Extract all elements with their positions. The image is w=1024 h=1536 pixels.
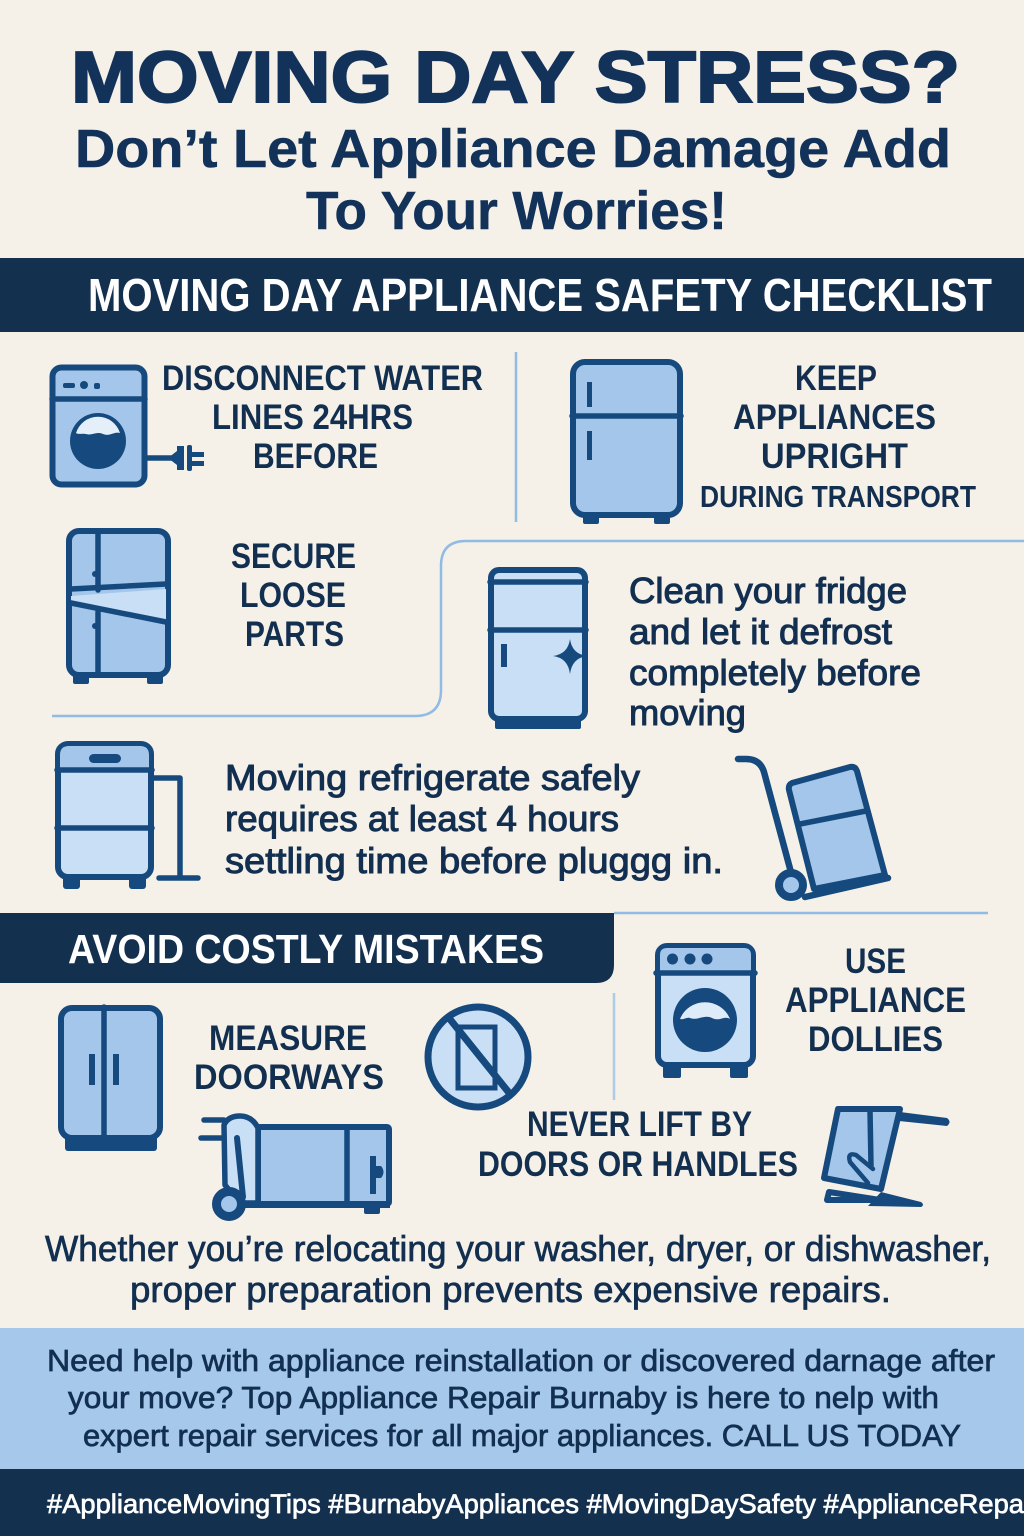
text: keep appliances upright: DURING TRANSPORT: [700, 479, 976, 514]
text: use appliance dollies: APPLIANCE: [785, 981, 966, 1020]
text: keep appliances upright: APPLIANCES: [733, 398, 936, 437]
icon: clean fridge with sparkle: [490, 570, 587, 729]
title: Don’t Let Appliance Damage Add: [75, 119, 951, 179]
text: use appliance dollies: DOLLIES: [808, 1020, 943, 1059]
panel: call to action: your move? Top Appliance Repair Burnaby is here to nelp with: [68, 1380, 939, 1415]
text: closing statement: Whether you’re relocating your washer, dryer, or dishwasher,: [45, 1228, 991, 1269]
text: keep appliances upright: [700, 359, 976, 514]
icon: no lifting symbol: [428, 1007, 528, 1107]
text: clean your fridge: and let it defrost: [629, 611, 892, 652]
text: clean your fridge: Clean your fridge: [629, 570, 907, 611]
icon: french door fridge: [61, 1007, 160, 1151]
text: moving refrigerate safely: [225, 757, 723, 881]
section banner: safety checklist: [0, 258, 1024, 332]
text: secure loose parts: SECURE: [231, 537, 356, 576]
text: keep appliances upright: KEEP: [795, 359, 877, 398]
text: keep appliances upright: UPRIGHT: [761, 437, 908, 476]
panel: call to action: expert repair services for all major appliances. CALL US TODAY: [83, 1418, 961, 1453]
icon: appliance on dolly: [201, 1116, 390, 1216]
icon: upright fridge: [572, 362, 681, 524]
text: moving refrigerate safely: Moving refrigerate safely: [225, 757, 640, 798]
icon: dryer appliance with stand: [57, 744, 198, 889]
text: disconnect water lines: DISCONNECT WATER: [162, 359, 483, 398]
icon: washer with unplugged cord: [52, 368, 204, 484]
text: measure doorways: [194, 1019, 384, 1097]
text: closing statement: proper preparation prevents expensive repairs.: [130, 1269, 891, 1310]
icon: fridge on hand truck: [738, 759, 888, 897]
panel: call to action: [0, 1328, 1024, 1469]
text: moving refrigerate safely: settling time before pluggg in.: [225, 840, 723, 881]
text: clean your fridge: completely before: [629, 652, 921, 693]
title: To Your Worries!: [306, 181, 727, 241]
text: closing statement: [45, 1228, 991, 1310]
title: MOVING DAY STRESS?: [71, 38, 960, 118]
icon: washer with drum: [656, 946, 755, 1078]
text: clean your fridge: [629, 570, 921, 733]
text: clean your fridge: moving: [629, 692, 746, 733]
text: use appliance dollies: USE: [845, 942, 906, 981]
footer: hashtags: #ApplianceMovingTips #BurnabyAppliances #MovingDaySafety #ApplianceRepa: [47, 1489, 1024, 1519]
section banner: avoid costly mistakes: [0, 913, 614, 983]
icon: tilted appliance with hand on handle: [824, 1109, 950, 1207]
text: secure loose parts: LOOSE: [240, 576, 346, 615]
text: measure doorways: DOORWAYS: [194, 1058, 384, 1097]
text: disconnect water lines: [162, 359, 483, 476]
text: secure loose parts: [231, 537, 356, 654]
text: never lift by doors or handles: [478, 1105, 798, 1184]
text: use appliance dollies: [785, 942, 966, 1059]
icon: fridge with strapped loose parts: [69, 531, 168, 684]
text: measure doorways: MEASURE: [209, 1019, 367, 1058]
title: [71, 38, 960, 241]
section banner: avoid costly mistakes: AVOID COSTLY MISTAKES: [68, 926, 544, 972]
text: secure loose parts: PARTS: [245, 615, 344, 654]
text: never lift by doors or handles: DOORS OR HANDLES: [478, 1145, 798, 1184]
footer: hashtags: [0, 1469, 1024, 1536]
panel: call to action: Need help with appliance reinstallation or discovered darnage after: [47, 1343, 995, 1378]
text: disconnect water lines: LINES 24HRS: [212, 398, 413, 437]
text: disconnect water lines: BEFORE: [253, 437, 378, 476]
text: never lift by doors or handles: NEVER LIFT BY: [527, 1105, 752, 1144]
text: moving refrigerate safely: requires at least 4 hours: [225, 798, 619, 839]
